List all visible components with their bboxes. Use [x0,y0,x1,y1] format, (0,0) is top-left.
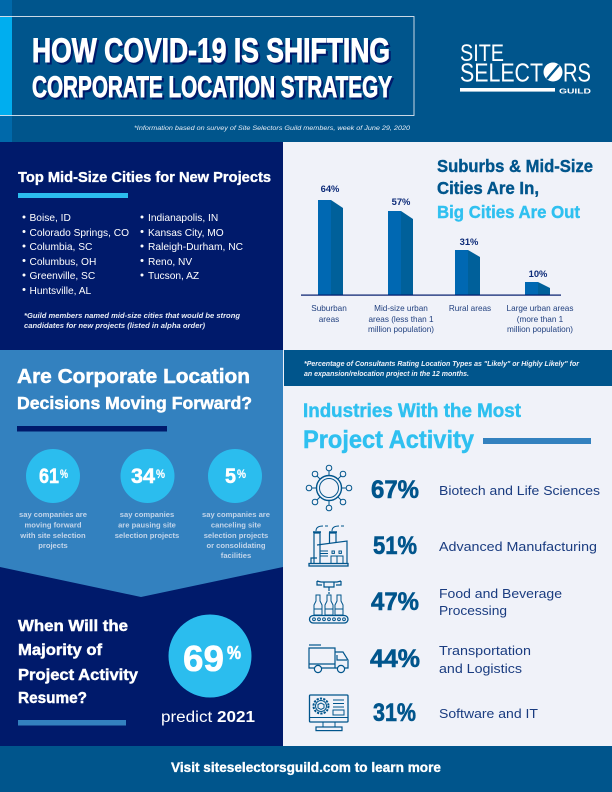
stat: 34% pausing: are pausing site [118,520,176,530]
stat: 5% canceling: selection projects [204,531,268,540]
row: transportation: and Logistics [439,662,522,676]
stat: 5% canceling: facilities [221,551,251,560]
row: manufacturing: 51% [373,532,417,560]
bar: suburban 64% [318,183,343,295]
heading: suburbs: Big Cities Are Out [437,202,580,222]
city list, column two: Raleigh-Durham, NC [148,242,243,253]
axis labels: areas (less than 1 [368,315,434,324]
stat: 34% pausing: 34 [131,465,155,488]
stat: 34% pausing: % [156,467,165,481]
stat: 5% canceling: 5 [225,465,236,488]
logo: Site Selectors Guild [460,40,592,96]
survey footnote: *Information based on survey of Site Selectors Guild members, week of June 29, 2020 [134,125,410,132]
panel: decisions moving forward [0,350,283,597]
city list, column two: Kansas City, MO [148,228,224,239]
row: software [310,695,538,731]
row: manufacturing: Advanced Manufacturing [439,540,597,554]
row: food and beverage: 47% [371,588,419,616]
bar: rural 31%: 31% [460,236,479,247]
city list, column two: Indianapolis, IN [148,213,218,224]
row: biotech: Biotech and Life Sciences [439,484,600,498]
axis labels: areas [319,315,339,324]
heading: resume question: Majority of [18,642,103,659]
stat: 61% moving forward: moving forward [25,520,82,530]
axis labels: million population) [368,325,434,334]
stat: 5% canceling: say companies are [202,510,270,519]
icon: bottling line [310,581,348,623]
heading: suburbs: Suburbs & Mid-Size [437,156,593,176]
row: manufacturing [309,526,597,566]
heading: resume question [18,618,138,707]
cities footnote: *Guild members named mid-size cities that would be strong [24,311,240,320]
stat: 61% moving forward: % [60,467,68,481]
city list, column two [140,213,243,282]
bar: mid-size 57% [388,196,413,295]
heading: suburbs [437,156,593,222]
heading: industries: Project Activity [303,426,474,454]
panel: suburbs chart [284,142,612,350]
axis labels: Mid-size urban [374,304,428,313]
stat: 69%: % [227,643,241,663]
panel: header [0,0,612,142]
row: food and beverage: Food and Beverage [439,587,562,601]
panel: when will activity resume [0,350,283,746]
stat: 61% moving forward: projects [38,541,68,550]
icon: factory [309,526,348,566]
city list, column two: Tucson, AZ [148,271,199,282]
row: transportation: Transportation [439,644,531,658]
accent bar [18,720,126,726]
stat: 61% moving forward: 61 [39,465,59,488]
stat: 5% canceling: % [237,467,246,481]
heading: industries [303,401,522,454]
stat: 5% canceling [202,449,270,560]
logo: Site Selectors Guild: GUILD [559,86,592,96]
heading: resume question: When Will the [18,618,128,635]
city list, column one: Colorado Springs, CO [30,228,129,239]
prediction label: predict 2021 [161,709,255,726]
bar: mid-size 57%: 57% [392,196,411,207]
icon: truck [309,645,348,673]
heading: decisions: Decisions Moving Forward? [17,393,252,413]
stat: 61% moving forward: say companies are [19,510,87,519]
stat: 5% canceling: canceling site [211,520,261,530]
axis labels: Suburban [311,304,347,313]
stat: 34% pausing [115,449,179,540]
footer band [0,746,612,792]
icon: molecule [306,465,352,511]
axis labels: Rural areas [449,304,491,313]
band: chart footnote: *Percentage of Consultants Rating Location Types as "Likely" or Highly Likely" for [304,359,580,368]
axis labels: million population) [507,325,573,334]
heading: decisions: Are Corporate Location [17,365,250,388]
bar: rural 31% [455,236,480,295]
accent bar [17,426,167,432]
logo: Site Selectors Guild: RS [563,60,591,88]
row: software: 31% [373,699,416,727]
icon: monitor with gear [310,695,348,731]
heading: resume question: Project Activity [18,667,138,684]
bar: large urban 10% [525,268,550,295]
city list, column one: Huntsville, AL [30,286,92,297]
city list, column one: Columbus, OH [30,257,96,268]
stat: 5% canceling: or consolidating [206,541,266,550]
row: biotech: 67% [371,476,419,504]
row: transportation: 44% [370,645,420,673]
city list, column one [22,213,129,297]
accent bar [18,193,128,198]
accent bar [483,438,591,444]
heading: resume question: Resume? [18,690,87,707]
stat: 69% [168,614,252,698]
row: food and beverage [310,581,562,623]
city list, column one: Greenville, SC [30,271,95,282]
panel: industries [284,386,612,746]
row: biotech [306,465,600,511]
bar: large urban 10%: 10% [529,268,548,279]
logo: Site Selectors Guild: SELECT [460,60,543,88]
heading: decisions [17,365,252,413]
row: software: Software and IT [439,707,538,721]
row: transportation [309,644,531,676]
city list, column one: Columbia, SC [30,242,92,253]
title [32,32,392,104]
city list, column one: Boise, ID [30,213,71,224]
stat: 61% moving forward: with site selection [19,531,86,540]
stat: 69%: 69 [183,638,224,679]
heading: industries: Industries With the Most [303,401,522,422]
stat: 34% pausing: selection projects [115,531,179,540]
cities footnote [24,311,240,330]
title: CORPORATE LOCATION STRATEGY [32,71,392,104]
band: chart footnote [284,350,612,386]
axis labels [311,304,573,334]
bar chart [301,183,573,334]
heading: top cities: Top Mid-Size Cities for New Projects [18,170,271,186]
panel: top mid-size cities [0,142,283,350]
footer band: Visit siteselectorsguild.com to learn more [171,759,441,775]
city list, column two: Reno, NV [148,257,192,268]
axis labels: (more than 1 [517,315,564,324]
band: chart footnote: an expansion/relocation project in the 12 months. [304,369,469,378]
title: HOW COVID-19 IS SHIFTING [32,32,390,70]
logo: Site Selectors Guild: SITE [460,40,504,67]
heading: suburbs: Cities Are In, [437,178,539,198]
title box [0,16,414,116]
stat: 34% pausing: say companies [120,510,174,519]
row: food and beverage: Processing [439,604,507,618]
cities footnote: candidates for new projects (listed in alpha order) [24,321,206,330]
bar: suburban 64%: 64% [321,183,340,194]
axis labels: Large urban areas [507,304,573,313]
stat: 61% moving forward [19,449,87,550]
